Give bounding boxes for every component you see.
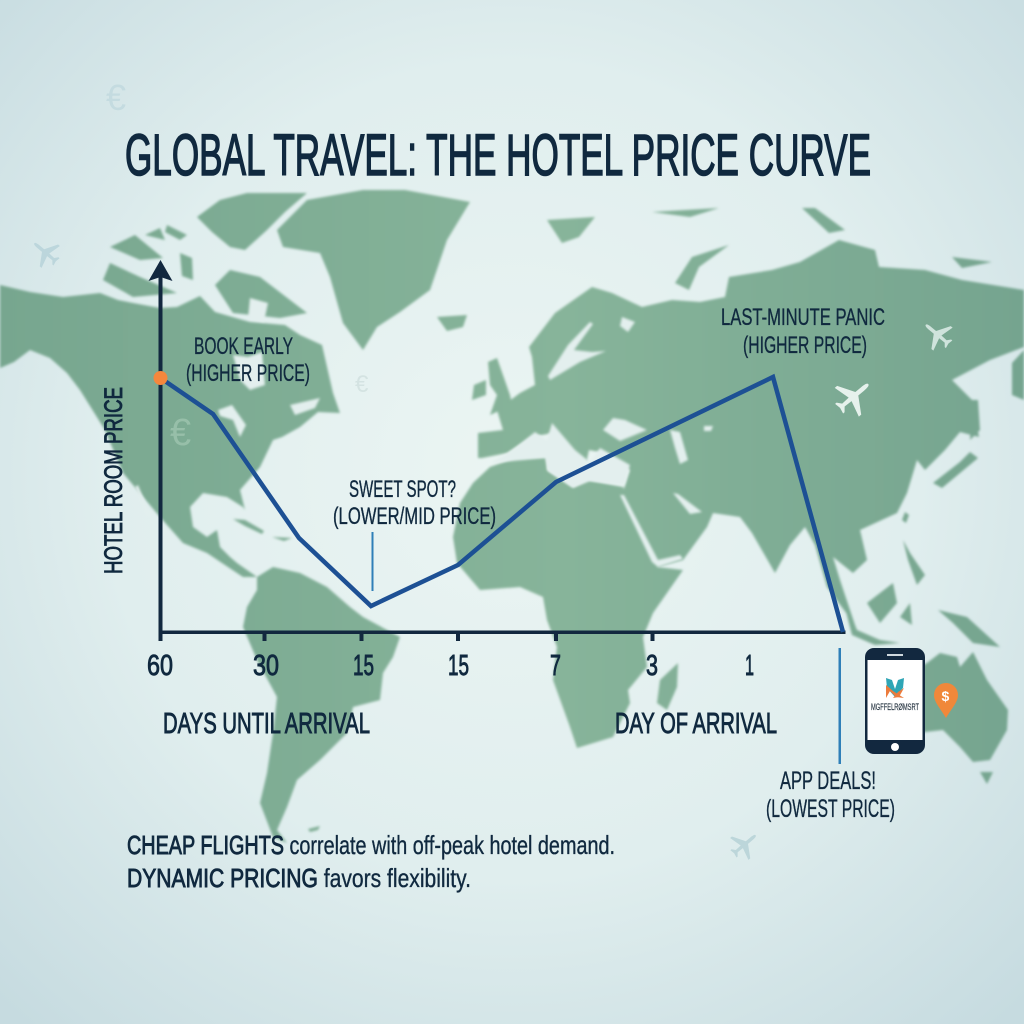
app name: MGFFELRØMSRT bbox=[871, 702, 919, 713]
map: Madagascar bbox=[657, 663, 678, 710]
x tick labels: 30 bbox=[253, 650, 279, 682]
world map bbox=[0, 190, 1024, 843]
sea: foxe basin bbox=[248, 298, 268, 322]
app deals pointer bbox=[838, 648, 841, 764]
icon: plane over Asia bbox=[827, 370, 880, 423]
sea: Baltic bbox=[548, 322, 606, 380]
icon: orange location pin: $ bbox=[942, 688, 950, 704]
callout: last-minute panic bbox=[721, 304, 885, 359]
x tick labels: 7 bbox=[550, 650, 561, 682]
footnote text bbox=[127, 830, 615, 893]
callout: sweet spot: (LOWER/MID PRICE) bbox=[333, 503, 496, 530]
x axis bbox=[158, 630, 846, 641]
y axis with arrow bbox=[148, 260, 172, 641]
map: Canadian Arctic islands bbox=[103, 193, 307, 318]
x tick labels: 15 bbox=[353, 650, 374, 682]
chart: hotel price curve bbox=[100, 260, 895, 823]
price line bbox=[160, 377, 843, 632]
icon: smartphone with app bbox=[865, 648, 925, 754]
sea: Baja gulf bbox=[135, 485, 150, 516]
x axis caption: days until arrival: DAYS UNTIL ARRIVAL bbox=[163, 708, 370, 740]
callout: app deals bbox=[766, 767, 895, 823]
callout: app deals: (LOWEST PRICE) bbox=[766, 795, 895, 823]
map: North America bbox=[0, 285, 340, 577]
callout: book early: (HIGHER PRICE) bbox=[186, 360, 310, 387]
icon: euro over North America: € bbox=[170, 412, 191, 454]
x tick labels: 1 bbox=[745, 650, 754, 682]
footnote line 2: DYNAMIC PRICING favors flexibility. bbox=[127, 863, 471, 893]
callout: sweet spot: SWEET SPOT? bbox=[349, 476, 456, 503]
x axis caption: day of arrival: DAY OF ARRIVAL bbox=[615, 708, 777, 740]
sea: Caspian bbox=[670, 430, 688, 464]
sea: Red Sea bbox=[620, 495, 683, 567]
map: Iceland bbox=[437, 315, 467, 331]
x tick labels: 15 bbox=[448, 650, 469, 682]
icon: orange location pin bbox=[934, 683, 958, 718]
map: Eurasia bbox=[478, 240, 1024, 625]
map: Southeast Asia islands bbox=[843, 512, 1000, 647]
map: Greenland bbox=[277, 190, 470, 350]
sea: Mediterranean bbox=[490, 423, 630, 488]
callout: book early bbox=[186, 333, 310, 387]
icon: euro over Atlantic: € bbox=[355, 371, 369, 398]
map: Caribbean islands bbox=[233, 519, 292, 541]
callout: app deals: APP DEALS! bbox=[780, 767, 876, 795]
x tick labels: 3 bbox=[646, 650, 658, 682]
map: UK and Ireland bbox=[472, 358, 512, 415]
callout: last-minute panic: (HIGHER PRICE) bbox=[743, 332, 867, 359]
x tick labels bbox=[147, 650, 754, 682]
map: Falkland bbox=[308, 826, 320, 832]
sea: Gulf of St Lawrence bbox=[290, 398, 320, 415]
inland seas bbox=[135, 298, 713, 567]
app logo bbox=[886, 678, 904, 698]
sea: Great Lakes bbox=[218, 405, 246, 437]
icon: euro top left: € bbox=[106, 77, 126, 118]
map: Novaya Zemlya and arctic islands bbox=[547, 208, 1024, 400]
start marker bbox=[154, 371, 168, 385]
sea: White Sea bbox=[620, 317, 635, 332]
map: Japan and Sakhalin bbox=[933, 400, 980, 488]
y axis label: HOTEL ROOM PRICE bbox=[100, 387, 128, 574]
map: South America bbox=[243, 567, 400, 843]
callout: last-minute panic: LAST-MINUTE PANIC bbox=[721, 304, 885, 331]
sea: Hudson Bay bbox=[233, 352, 265, 390]
icon: plane top left bbox=[25, 232, 66, 273]
icon: plane over Russia bbox=[916, 313, 959, 356]
callout: book early: BOOK EARLY bbox=[194, 333, 293, 360]
map: Australia bbox=[895, 652, 1008, 784]
sea: Aral bbox=[704, 426, 713, 431]
map: Africa bbox=[453, 457, 683, 748]
callout: sweet spot bbox=[333, 476, 496, 530]
x tick labels: 60 bbox=[147, 650, 173, 682]
sweet spot pointer bbox=[372, 532, 374, 591]
footnote line 1: CHEAP FLIGHTS correlate with off-peak hotel demand. bbox=[127, 830, 615, 860]
icon: plane bottom bbox=[724, 824, 765, 865]
sea: Black Sea bbox=[603, 418, 647, 441]
sea: Persian Gulf bbox=[673, 493, 702, 514]
